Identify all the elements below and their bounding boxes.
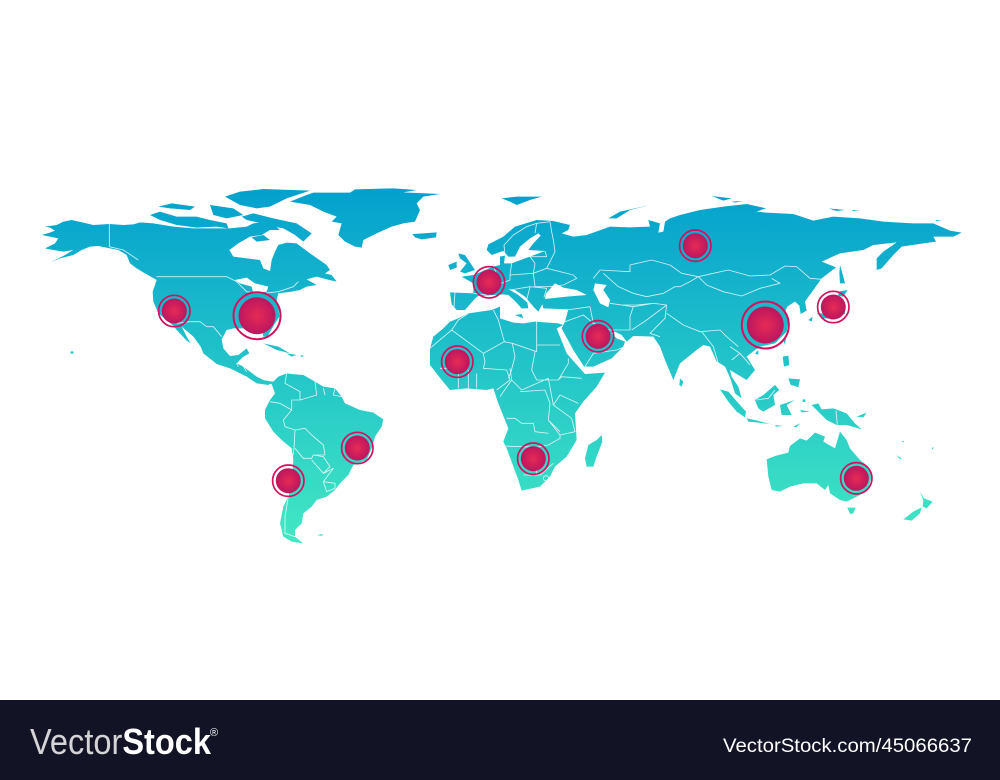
Eurasia islands <box>448 196 942 387</box>
North America borders <box>109 224 298 372</box>
Iceland <box>412 232 437 239</box>
Greenland <box>290 188 440 248</box>
hotspot: southern Africa <box>518 443 549 474</box>
hotspot: Russia <box>680 230 711 261</box>
Eurasia mainland <box>450 204 962 398</box>
hotspot: Europe <box>473 267 505 298</box>
hotspot: western USA <box>159 295 190 327</box>
registered mark: ® <box>210 727 218 739</box>
world map <box>42 188 962 543</box>
footer bar <box>0 700 1000 780</box>
Eurasia borders <box>454 222 822 367</box>
South America borders <box>270 373 342 537</box>
Falkland Islands <box>317 534 323 536</box>
Australia <box>767 432 872 502</box>
South America <box>257 373 383 543</box>
Tasmania <box>847 508 856 514</box>
hotspot: eastern USA <box>234 292 280 339</box>
Black Sea <box>545 283 587 299</box>
logo wordmark: VectorStock <box>30 721 212 762</box>
Caribbean islands and Hawaii <box>71 343 303 357</box>
hotspot: China <box>742 302 789 348</box>
hotspot: Brazil <box>342 432 373 464</box>
Southeast Asia and Oceania <box>720 378 934 521</box>
Canadian Arctic islands <box>150 189 312 275</box>
Sumatra, Java and Borneo <box>720 385 779 424</box>
Great Lakes <box>235 278 268 293</box>
Caspian Sea <box>593 283 610 307</box>
hotspot: Australia <box>841 463 872 494</box>
Eurasia <box>448 196 962 398</box>
Africa borders <box>430 310 582 475</box>
New Zealand <box>903 492 933 521</box>
image id: VectorStock.com/45066637 <box>723 736 972 757</box>
North America mainland <box>42 220 337 385</box>
hotspot: Japan <box>818 291 849 323</box>
New Guinea <box>812 403 862 429</box>
Sulawesi and small islands <box>775 378 934 459</box>
hotspot: West Africa <box>442 346 473 377</box>
Africa <box>430 307 605 491</box>
hotspot: Chile <box>273 465 304 496</box>
Madagascar <box>585 435 602 467</box>
North America and Greenland <box>42 188 440 385</box>
South America and Africa <box>257 307 605 543</box>
hotspot: Arabia <box>582 321 614 352</box>
